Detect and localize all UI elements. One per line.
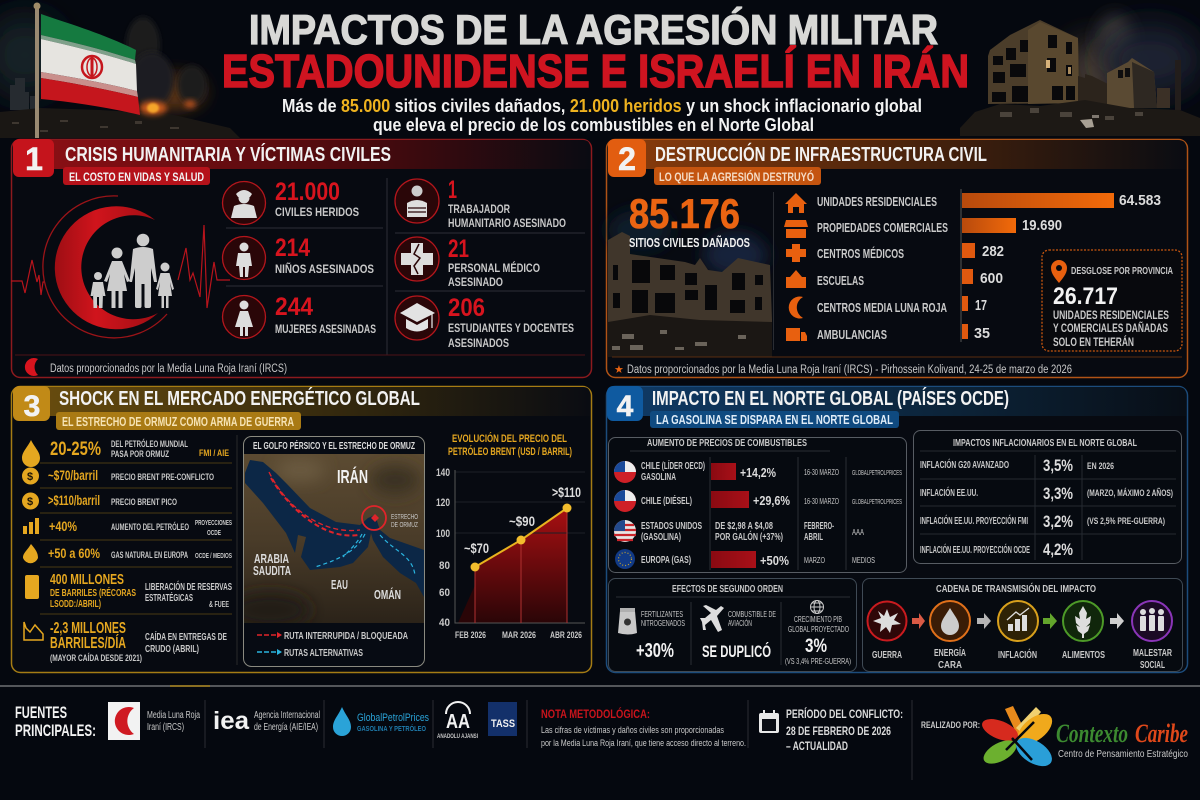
source note bbox=[612, 357, 1182, 376]
list: indicators: BARRILES/DÍA bbox=[50, 633, 126, 652]
subheading pill bbox=[56, 412, 301, 430]
table: fuel price increases: +14,2% bbox=[740, 465, 776, 480]
box: impact chain bbox=[862, 578, 1182, 672]
flag emblem bbox=[82, 55, 102, 79]
callout: desglose por provincia: 26.717 bbox=[1053, 283, 1118, 310]
icon: flag of Iran bbox=[34, 2, 140, 138]
stat: personal médico: 21 bbox=[448, 235, 469, 263]
step: guerra: GUERRA bbox=[872, 649, 902, 661]
logo: GlobalPetrolPrices bbox=[333, 707, 429, 736]
header image: burning city with flag bbox=[0, 2, 240, 138]
source note bbox=[15, 355, 585, 376]
stat: mujeres asesinadas bbox=[222, 293, 376, 338]
list: indicators: LIBERACIÓN DE RESERVAS bbox=[145, 580, 232, 593]
heading: IMPACTO EN EL NORTE GLOBAL (PAÍSES OCDE) bbox=[652, 387, 1009, 410]
line chart: Brent price: 100 bbox=[436, 528, 450, 540]
logo: TASS bbox=[488, 702, 517, 736]
icon: calendar bbox=[759, 710, 779, 733]
source note: Datos proporcionados por la Media Luna Roja Iraní (IRCS) bbox=[50, 363, 287, 375]
line chart: Brent price: EVOLUCIÓN DEL PRECIO DEL bbox=[452, 432, 567, 445]
subtitle: que eleva el precio de los combustibles en el Norte Global bbox=[373, 115, 814, 135]
arrow bbox=[912, 613, 925, 629]
map: Persian Gulf and Strait of Hormuz: EAU bbox=[331, 577, 348, 592]
section number 3 bbox=[13, 386, 50, 423]
section number 3: 3 bbox=[24, 390, 40, 423]
box: second order effects: 3% bbox=[805, 636, 827, 657]
icons: energy indicators: $ bbox=[27, 496, 33, 508]
table: fuel price increases: GLOBALPETROLPRICES bbox=[852, 497, 902, 506]
photo: ruined building bbox=[608, 210, 772, 357]
title: IMPACTOS DE LA AGRESIÓN MILITAR bbox=[249, 5, 938, 53]
line chart: Brent price: PETRÓLEO BRENT (USD / BARRIL) bbox=[448, 445, 572, 458]
map legend bbox=[257, 631, 408, 659]
list: indicators: GAS NATURAL EN EUROPA bbox=[111, 550, 188, 561]
arrow bbox=[1110, 613, 1124, 629]
stat: civiles heridos bbox=[222, 178, 359, 224]
heading: DESTRUCCIÓN DE INFRAESTRUCTURA CIVIL bbox=[655, 142, 987, 166]
source note: ★ bbox=[614, 364, 624, 376]
line chart: Brent price: MAR 2026 bbox=[502, 630, 536, 641]
subtitle: Más de 85.000 sitios civiles dañados, 21.000 heridos y un shock inflacionario global bbox=[282, 96, 922, 116]
table: fuel price increases: +50% bbox=[760, 553, 789, 568]
box: second order effects: AVIACIÓN bbox=[728, 618, 752, 628]
list: indicators: LSODD:/ABRIL) bbox=[50, 599, 101, 610]
ECG line right bbox=[178, 225, 230, 308]
panel: impacto en el norte global bbox=[606, 386, 1188, 672]
subheading pill: EL ESTRECHO DE ORMUZ COMO ARMA DE GUERRA bbox=[62, 414, 294, 429]
list: indicators: & FUEE bbox=[209, 600, 229, 609]
subheading pill bbox=[63, 167, 210, 185]
line chart: Brent price: ~$70 bbox=[464, 540, 489, 556]
list: indicators: OCDE / MEDIOS bbox=[195, 551, 232, 560]
step: guerra bbox=[868, 602, 906, 661]
table: fuel price increases bbox=[608, 437, 906, 572]
map: Persian Gulf and Strait of Hormuz bbox=[230, 436, 424, 666]
table: fuel price increases: CHILE (LÍDER OECD) bbox=[641, 459, 705, 472]
footer dividers bbox=[205, 700, 912, 780]
stat: civiles heridos: CIVILES HERIDOS bbox=[275, 205, 359, 219]
flag icons bbox=[614, 461, 636, 569]
list: indicators bbox=[22, 438, 232, 663]
list: indicators: PASA POR ORMUZ bbox=[111, 449, 169, 460]
logo: Media Luna Roja: Iraní (IRCS) bbox=[147, 722, 184, 733]
table: inflation impacts bbox=[914, 430, 1182, 564]
callout: desglose por provincia: SOLO EN TEHERÁN bbox=[1053, 334, 1134, 349]
table: fuel price increases: MARZO bbox=[804, 555, 825, 565]
panel: crisis humanitaria bbox=[11, 139, 592, 378]
sources heading: FUENTES bbox=[15, 703, 67, 722]
stat: trabajador humanitario: TRABAJADOR bbox=[448, 202, 510, 216]
table: fuel price increases: EUROPA (GAS) bbox=[641, 554, 691, 566]
logo: IEA: de Energía (AIE/IEA) bbox=[254, 722, 318, 733]
table: fuel price increases: ESTADOS UNIDOS bbox=[641, 520, 702, 532]
stat: personal médico bbox=[395, 235, 540, 289]
list: indicators: OCDE bbox=[207, 528, 221, 537]
table: inflation impacts: INFLACIÓN G20 AVANZADO bbox=[920, 458, 1009, 471]
step: inflación: INFLACIÓN bbox=[998, 648, 1037, 661]
section number 4: 4 bbox=[617, 390, 634, 423]
logo: GlobalPetrolPrices: GASOLINA Y PETRÓLEO bbox=[357, 724, 426, 733]
conflict period bbox=[786, 706, 903, 753]
bar chart: destroyed infrastructure: 64.583 bbox=[1119, 192, 1161, 209]
icon: globe bbox=[810, 600, 824, 614]
main ruin bbox=[988, 20, 1079, 104]
section number 1: 1 bbox=[25, 141, 43, 177]
box: second order effects: +30% bbox=[636, 640, 674, 662]
box: second order effects bbox=[608, 578, 856, 672]
list: indicators: FMI / AIE bbox=[199, 448, 229, 458]
table: fuel price increases: 16-30 MARZO bbox=[804, 497, 839, 506]
divider bbox=[772, 192, 774, 350]
bar chart: destroyed infrastructure: ESCUELAS bbox=[817, 273, 864, 288]
conflict period: 28 DE FEBRERO DE 2026 bbox=[786, 724, 891, 738]
list: indicators: AUMENTO DEL PETRÓLEO bbox=[111, 521, 189, 533]
icons: energy indicators bbox=[22, 440, 43, 640]
big number: 85.176 bbox=[629, 190, 740, 237]
bar chart: destroyed infrastructure: CENTROS MEDIA LUNA ROJA bbox=[817, 300, 947, 315]
panel: shock energético bbox=[12, 386, 592, 672]
table: fuel price increases: GASOLINA bbox=[641, 471, 676, 483]
stat: trabajador humanitario: 1 bbox=[448, 176, 457, 204]
stat: estudiantes y docentes bbox=[395, 294, 574, 350]
box: second order effects: GLOBAL PROYECTADO bbox=[788, 624, 849, 634]
line chart: Brent price: FEB 2026 bbox=[455, 630, 486, 641]
table: fuel price increases: AUMENTO DE PRECIOS DE COMBUSTIBLES bbox=[647, 437, 807, 449]
logo: IEA bbox=[213, 707, 320, 735]
section number 4 bbox=[607, 386, 643, 423]
table: fuel price increases: CHILE (DIÉSEL) bbox=[641, 494, 692, 507]
list: indicators: (MAYOR CAÍDA DESDE 2021) bbox=[50, 653, 142, 663]
step: malestar social: SOCIAL bbox=[1140, 659, 1165, 671]
callout: desglose por provincia bbox=[1042, 250, 1182, 351]
map: Persian Gulf and Strait of Hormuz: ESTRECHO bbox=[391, 512, 418, 521]
map: Persian Gulf and Strait of Hormuz: ARABIA bbox=[254, 551, 289, 566]
table: fuel price increases: POR GALÓN (+37%) bbox=[715, 530, 783, 543]
list: indicators: DE BARRILES (RÉCORAS bbox=[50, 586, 136, 599]
logo: Contexto Caribe bbox=[979, 706, 1188, 772]
logo: Anadolu Ajansi bbox=[437, 702, 478, 740]
logo: Media Luna Roja bbox=[108, 702, 200, 740]
list: indicators: 400 MILLONES bbox=[50, 571, 124, 588]
table: inflation impacts: 3,3% bbox=[1043, 484, 1073, 503]
stat: niños asesinados bbox=[222, 234, 374, 280]
map: Persian Gulf and Strait of Hormuz: OMÁN bbox=[374, 587, 401, 602]
line chart: Brent price bbox=[436, 432, 585, 641]
table: fuel price increases: MEDIOS bbox=[852, 556, 875, 565]
line chart: Brent price: >$110 bbox=[552, 484, 581, 500]
stat: estudiantes y docentes: ESTUDIANTES Y DOCENTES bbox=[448, 321, 574, 335]
list: indicators: DEL PETRÓLEO MUNDIAL bbox=[111, 438, 188, 450]
table: inflation impacts: 4,2% bbox=[1043, 540, 1073, 559]
arrow bbox=[1043, 613, 1057, 629]
bar chart: destroyed infrastructure: PROPIEDADES COMERCIALES bbox=[817, 220, 948, 235]
map legend: RUTAS ALTERNATIVAS bbox=[284, 648, 363, 659]
icons: infrastructure categories bbox=[784, 193, 808, 341]
list: indicators: CRUDO (ABRIL) bbox=[145, 644, 199, 655]
bar chart: destroyed infrastructure: 35 bbox=[974, 325, 990, 342]
conflict period: – ACTUALIDAD bbox=[786, 739, 848, 753]
line chart: Brent price: 80 bbox=[439, 560, 450, 572]
bar chart: destroyed infrastructure: 600 bbox=[980, 270, 1003, 287]
methodology note: por la Media Luna Roja Iraní, que tiene acceso directo al terreno. bbox=[541, 738, 746, 748]
section number 1 bbox=[13, 139, 54, 177]
icon: plane bbox=[700, 605, 724, 632]
box: second order effects: COMBUSTIBLE DE bbox=[728, 609, 776, 619]
table: inflation impacts: INFLACIÓN EE.UU. bbox=[920, 486, 978, 499]
subheading pill: EL COSTO EN VIDAS Y SALUD bbox=[69, 170, 204, 184]
subheading pill: LA GASOLINA SE DISPARA EN EL NORTE GLOBAL bbox=[656, 412, 893, 427]
logo: Contexto Caribe: Contexto bbox=[1056, 719, 1128, 748]
map legend: RUTA INTERRUPIDA / BLOQUEADA bbox=[284, 631, 408, 642]
step: energía cara bbox=[930, 601, 970, 671]
map: Persian Gulf and Strait of Hormuz: EL GOLFO PÉRSICO Y EL ESTRECHO DE ORMUZ bbox=[253, 439, 415, 452]
box: impact chain: CADENA DE TRANSMISIÓN DEL IMPACTO bbox=[936, 582, 1096, 595]
list: indicators: +40% bbox=[49, 518, 77, 534]
bar chart: destroyed infrastructure: 17 bbox=[975, 297, 987, 314]
stat: mujeres asesinadas: 244 bbox=[275, 293, 313, 321]
list: indicators: ~$70/barril bbox=[48, 467, 98, 483]
logo: IEA: Agencia Internacional bbox=[254, 710, 320, 721]
stat: trabajador humanitario: HUMANITARIO ASESINADO bbox=[448, 216, 566, 230]
section number 2: 2 bbox=[618, 141, 636, 177]
logo: GlobalPetrolPrices: GlobalPetrolPrices bbox=[357, 712, 429, 724]
table: inflation impacts: (VS 2,5% PRE-GUERRA) bbox=[1087, 516, 1165, 526]
table: inflation impacts: 3,2% bbox=[1043, 512, 1073, 531]
icon: fertilizer sack bbox=[618, 608, 637, 634]
map: Persian Gulf and Strait of Hormuz: IRÁN bbox=[337, 466, 368, 487]
logo: TASS: TASS bbox=[491, 718, 515, 730]
logo: Anadolu Ajansi: ANADOLU AJANSI bbox=[437, 733, 478, 740]
source note: Datos proporcionados por la Media Luna Roja Iraní (IRCS) - Pirhossein Kolivand, 24-25 de marzo de 2026 bbox=[627, 364, 1072, 376]
table: fuel price increases: FEBRERO- bbox=[804, 521, 834, 532]
stat: niños asesinados: 214 bbox=[275, 234, 310, 262]
sources heading: PRINCIPALES: bbox=[15, 721, 96, 740]
title bbox=[222, 5, 969, 97]
box: second order effects: (VS 3,4% PRE-GUERRA) bbox=[785, 656, 851, 666]
title: ESTADOUNIDENSE E ISRAELÍ EN IRÁN bbox=[222, 45, 969, 97]
methodology note: NOTA METODOLÓGICA: bbox=[541, 706, 650, 721]
ECG line left bbox=[11, 260, 44, 295]
table: inflation impacts: 3,5% bbox=[1043, 456, 1073, 475]
big number: SITIOS CIVILES DAÑADOS bbox=[629, 235, 750, 250]
list: indicators: >$110/barril bbox=[48, 492, 100, 508]
methodology note bbox=[541, 706, 746, 748]
stat: civiles heridos: 21.000 bbox=[275, 178, 340, 206]
list: indicators: PRECIO BRENT PICO bbox=[111, 497, 177, 508]
header image: ruined buildings bbox=[960, 14, 1200, 136]
table: fuel price increases: GLOBALPETROLPRICES bbox=[852, 468, 902, 477]
step: inflación bbox=[998, 601, 1038, 661]
table: inflation impacts: INFLACIÓN EE.UU. PROYECCIÓN OCDE bbox=[920, 543, 1030, 556]
stat: trabajador humanitario bbox=[395, 176, 566, 230]
step: malestar social: MALESTAR bbox=[1133, 647, 1172, 659]
list: indicators: PRECIO BRENT PRE-CONFLICTO bbox=[111, 472, 214, 483]
list: indicators: 20-25% bbox=[50, 439, 101, 460]
table: fuel price increases: DE $2,98 A $4,08 bbox=[715, 520, 773, 532]
line chart: Brent price: ~$90 bbox=[509, 513, 535, 529]
list: indicators: +50 a 60% bbox=[48, 545, 100, 561]
stat: estudiantes y docentes: 206 bbox=[448, 294, 485, 322]
list: indicators: PROYECCIONES bbox=[195, 518, 232, 527]
stat: estudiantes y docentes: ASESINADOS bbox=[448, 336, 509, 350]
arrow bbox=[977, 613, 991, 629]
list: indicators: -2,3 MILLONES bbox=[50, 620, 126, 637]
subheading pill bbox=[650, 411, 899, 428]
logo: Anadolu Ajansi: AA bbox=[446, 711, 470, 733]
table: inflation impacts: EN 2026 bbox=[1087, 461, 1114, 471]
stat: mujeres asesinadas: MUJERES ASESINADAS bbox=[275, 322, 376, 336]
box: second order effects: CRECIMIENTO PIB bbox=[794, 614, 842, 624]
subheading pill bbox=[654, 167, 821, 185]
panel: destrucción de infraestructura bbox=[606, 139, 1188, 378]
table: fuel price increases: 16-30 MARZO bbox=[804, 468, 839, 477]
heading: SHOCK EN EL MERCADO ENERGÉTICO GLOBAL bbox=[59, 387, 420, 410]
list: indicators: ESTRATÉGICAS bbox=[145, 591, 193, 604]
sources heading bbox=[15, 703, 96, 740]
line chart: Brent price: 60 bbox=[439, 587, 450, 599]
logo: Media Luna Roja: Media Luna Roja bbox=[147, 710, 200, 721]
line chart: Brent price: ABR 2026 bbox=[550, 630, 582, 641]
bar chart: destroyed infrastructure: 19.690 bbox=[1022, 217, 1062, 234]
stat: personal médico: PERSONAL MÉDICO bbox=[448, 260, 540, 275]
bar chart: destroyed infrastructure: AMBULANCIAS bbox=[817, 327, 887, 342]
bar chart: destroyed infrastructure: UNIDADES RESIDENCIALES bbox=[817, 194, 937, 209]
subheading pill: LO QUE LA AGRESIÓN DESTRUYÓ bbox=[659, 169, 814, 184]
step: malestar social bbox=[1132, 601, 1172, 671]
credit label: REALIZADO POR: bbox=[921, 720, 980, 731]
icon: red crescent with family bbox=[43, 196, 174, 338]
line chart: Brent price: 140 bbox=[436, 467, 450, 479]
step: energía cara: CARA bbox=[938, 659, 962, 671]
map: Persian Gulf and Strait of Hormuz: DE ORMUZ bbox=[391, 520, 418, 529]
stats dividers bbox=[226, 178, 585, 355]
icons: energy indicators: $ bbox=[27, 471, 33, 483]
line chart: Brent price: 120 bbox=[436, 497, 450, 509]
step: alimentos bbox=[1062, 601, 1105, 661]
bar chart: destroyed infrastructure: CENTROS MÉDICOS bbox=[817, 246, 904, 261]
conflict period: PERÍODO DEL CONFLICTO: bbox=[786, 706, 903, 721]
table: fuel price increases: ABRIL bbox=[804, 532, 823, 543]
table: fuel price increases: (GASOLINA) bbox=[641, 531, 681, 543]
box: second order effects: SE DUPLICÓ bbox=[702, 642, 771, 661]
divider bbox=[236, 435, 238, 665]
stat: niños asesinados: NIÑOS ASESINADOS bbox=[275, 261, 374, 276]
list: indicators: CAÍDA EN ENTREGAS DE bbox=[145, 630, 227, 643]
table: inflation impacts: INFLACIÓN EE.UU. PROYECCIÓN FMI bbox=[920, 514, 1028, 527]
subtitle bbox=[282, 96, 922, 135]
stat: personal médico: ASESINADO bbox=[448, 275, 503, 289]
bar chart: destroyed infrastructure: 282 bbox=[982, 243, 1004, 260]
box: second order effects: NITROGENADOS bbox=[641, 618, 685, 628]
step: alimentos: ALIMENTOS bbox=[1062, 649, 1105, 661]
heading: CRISIS HUMANITARIA Y VÍCTIMAS CIVILES bbox=[65, 143, 391, 166]
box: second order effects: FERTILIZANTES bbox=[641, 609, 683, 619]
table: fuel price increases: +29,6% bbox=[753, 493, 790, 508]
table: fuel price increases: AAA bbox=[852, 528, 864, 537]
methodology note: Las cifras de víctimas y daños civiles son proporcionadas bbox=[541, 725, 724, 735]
logo: IEA: iea bbox=[213, 707, 250, 735]
box: second order effects: EFECTOS DE SEGUNDO ORDEN bbox=[672, 583, 783, 595]
bar chart: destroyed infrastructure bbox=[817, 189, 1161, 342]
line chart: Brent price: 40 bbox=[439, 617, 450, 629]
section number 2 bbox=[608, 139, 646, 177]
step: energía cara: ENERGÍA bbox=[934, 646, 966, 659]
footer bbox=[0, 685, 1200, 780]
map: Persian Gulf and Strait of Hormuz: SAUDITA bbox=[253, 563, 291, 578]
